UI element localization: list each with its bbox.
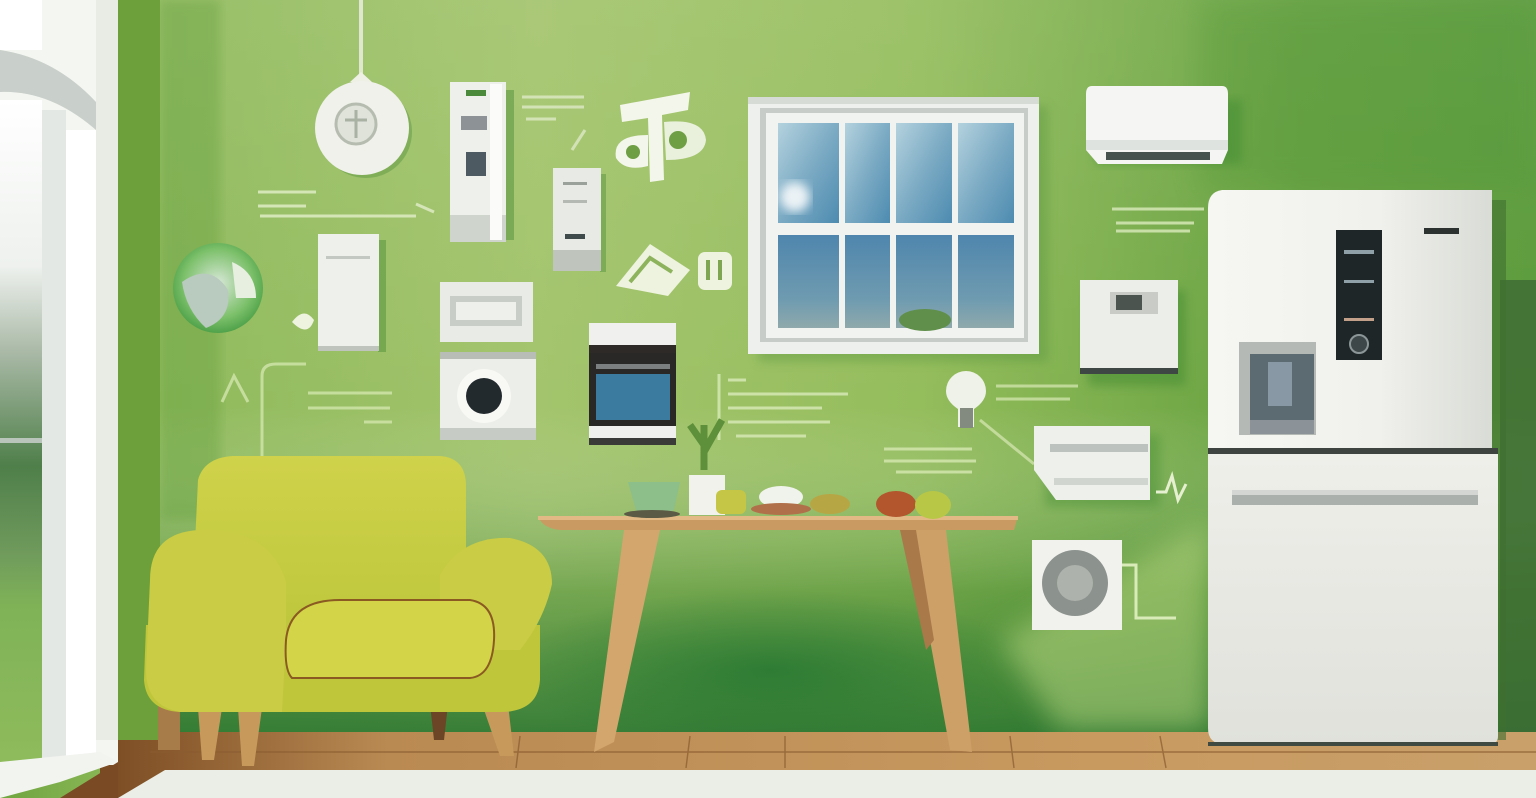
icon: globe <box>173 243 314 333</box>
icon: pulse line <box>1156 476 1186 500</box>
text block: label over fridge left <box>1112 209 1204 231</box>
water dispenser <box>1239 342 1316 435</box>
icon: refrigerator <box>1208 190 1506 746</box>
panel: central window <box>748 97 1048 362</box>
icon: armchair <box>144 456 552 766</box>
icon: fan unit <box>1032 540 1176 630</box>
fridge badge <box>1424 228 1459 234</box>
text block: heater label <box>884 449 976 472</box>
fridge control panel <box>1336 230 1382 360</box>
icon: oven <box>589 323 676 445</box>
icon: tall wall unit <box>450 82 514 242</box>
icon: dollar sign <box>616 92 706 182</box>
text block: upper left label <box>258 192 434 216</box>
icon: air conditioner <box>1086 86 1242 164</box>
panel: window on the left with outdoor view <box>0 0 160 798</box>
text block: left lower label <box>222 364 392 456</box>
icon: microwave <box>440 282 533 342</box>
icon: light bulb <box>946 371 986 428</box>
floor <box>100 732 1536 798</box>
text block: label beside tall unit <box>522 97 585 150</box>
icon: boiler <box>318 234 386 352</box>
text block: center label <box>719 374 848 440</box>
icon: items on table <box>624 420 951 519</box>
text block: bulb label <box>980 386 1078 464</box>
icon: wall heater <box>1034 426 1160 507</box>
icon: hanging thermostat dial <box>315 0 412 178</box>
icon: wall thermostat panel <box>1080 280 1186 386</box>
icon: table <box>538 516 1018 752</box>
icon: leaf and plug sketch <box>616 244 732 296</box>
icon: washing machine <box>440 352 536 440</box>
icon: small wall control <box>553 168 606 272</box>
